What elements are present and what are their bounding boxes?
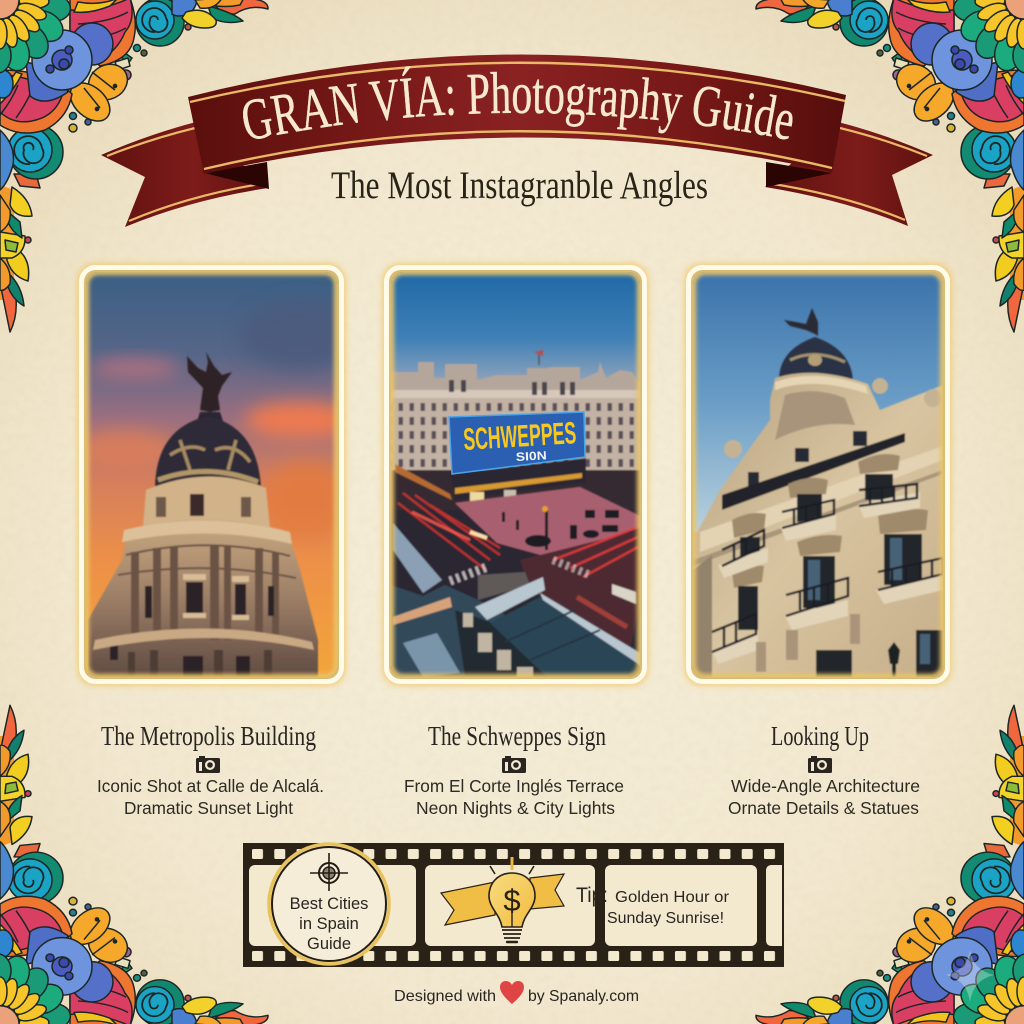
title ribbon banner: [101, 54, 933, 227]
caption description: Wide-Angle Architecture: [731, 776, 920, 796]
Schweppes billboard: SCHWEPPES: [462, 415, 577, 457]
badge text: Guide: [307, 935, 351, 953]
footer credit: [394, 981, 639, 1005]
photo card: Schweppes Sign: [383, 264, 648, 685]
caption description: Dramatic Sunset Light: [124, 798, 293, 818]
footer credit: Designed with: [394, 988, 496, 1005]
Schweppes billboard: [449, 412, 585, 474]
caption: Metropolis: [97, 721, 324, 818]
icon: heart: [500, 981, 524, 1004]
caption description: From El Corte Inglés Terrace: [404, 776, 624, 796]
tip text: Golden Hour or: [615, 889, 730, 906]
icon: faint star watermark: [946, 950, 994, 1002]
photo: ornate facade seen from below: [693, 272, 943, 677]
badge: Best Cities in Spain Guide: [269, 844, 389, 964]
inner gold glow: [391, 272, 640, 677]
footer credit: by Spanaly.com: [528, 988, 639, 1005]
icon: compass target: [310, 853, 348, 891]
floral corner: top right: [756, 0, 1024, 332]
inner gold glow: [86, 272, 337, 677]
tip text: Tip:: [576, 884, 608, 907]
title text: GRAN VÍA: Photography Guide: [243, 66, 793, 140]
film strip: [243, 843, 784, 967]
badge text: Best Cities: [290, 895, 368, 913]
photo card: Metropolis Building: [75, 264, 360, 685]
caption: Looking Up: [728, 721, 920, 818]
caption heading: Looking Up: [771, 721, 869, 751]
Schweppes billboard: SI0N: [515, 448, 547, 464]
caption description: Neon Nights & City Lights: [416, 798, 615, 818]
floral corner: top left: [0, 0, 268, 332]
floral corner: bottom left: [0, 705, 268, 1024]
icon: camera: [502, 756, 526, 773]
badge text: in Spain: [299, 915, 359, 933]
ribbon right tail: [765, 122, 933, 226]
caption description: Iconic Shot at Calle de Alcalá.: [97, 776, 324, 796]
caption description: Ornate Details & Statues: [728, 798, 919, 818]
inner gold glow: [693, 272, 943, 677]
photo: Schweppes sign at dusk: [391, 272, 640, 677]
caption heading: The Metropolis Building: [101, 721, 316, 751]
caption heading: The Schweppes Sign: [428, 721, 606, 751]
tip text: [576, 884, 730, 927]
icon: light bulb with ribbon: [441, 857, 564, 942]
caption: Schweppes: [404, 721, 624, 818]
ribbon left tail: [101, 122, 269, 227]
icon: camera: [808, 756, 832, 773]
subtitle: The Most Instagranble Angles: [331, 164, 708, 207]
ribbon main band: [188, 54, 846, 174]
icon: light bulb with ribbon: $: [503, 883, 521, 918]
floral corner: bottom right: [756, 705, 1024, 1024]
photo: Metropolis dome at sunset: [86, 272, 337, 677]
tip text: Sunday Sunrise!: [607, 910, 724, 927]
icon: camera: [196, 756, 220, 773]
photo card: Looking Up: [685, 264, 951, 685]
